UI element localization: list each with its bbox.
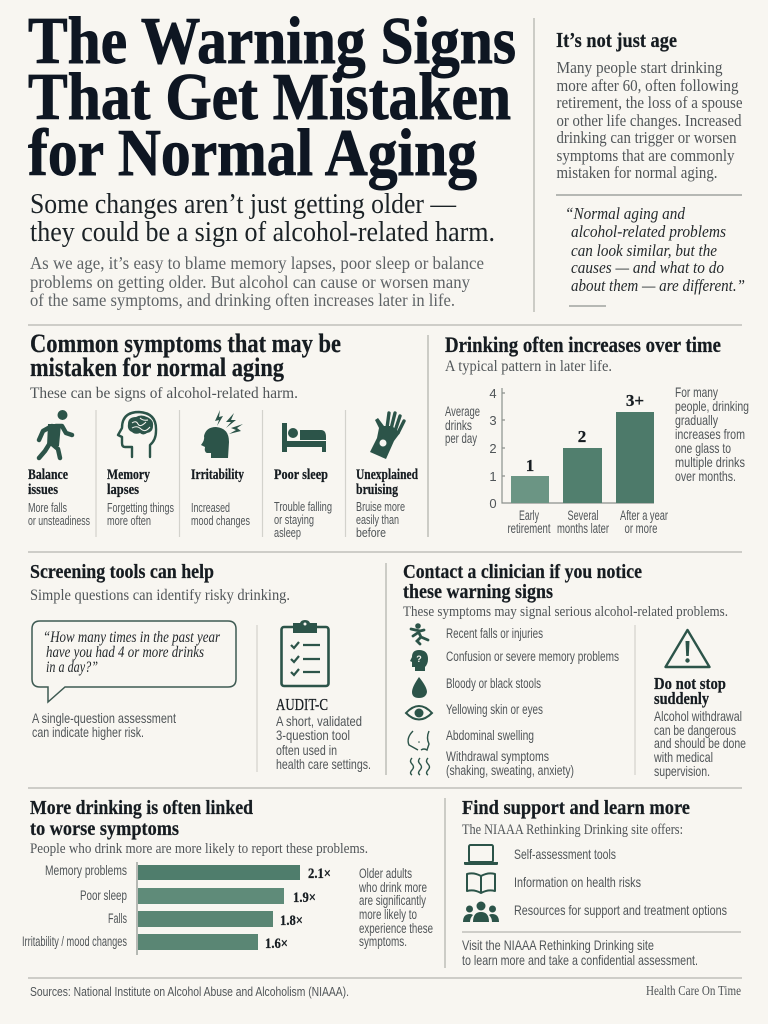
- text: AUDIT-C description: 3-question tool: [276, 727, 350, 743]
- pull quote: can look similar, but the: [571, 241, 717, 260]
- bar values: 2: [578, 427, 586, 446]
- text: AUDIT-C description: A short, validated: [276, 713, 362, 729]
- icon: people: [463, 902, 499, 922]
- y-axis ticks: 3: [489, 413, 497, 428]
- intro paragraph: [30, 253, 484, 310]
- bar values: 1: [526, 456, 534, 475]
- row: poor sleep: [80, 888, 316, 906]
- icon: bed: [282, 423, 326, 452]
- text: single question assessment: A single-question assessment: [32, 710, 176, 726]
- subheading: find support: The NIAAA Rethinking Drinking site offers:: [462, 822, 683, 838]
- subheading: screening tools: Simple questions can identify risky drinking.: [30, 587, 290, 604]
- heading: find support: Find support and learn more: [462, 797, 690, 819]
- warning sign: withdrawal symptoms: Withdrawal symptoms: [446, 749, 549, 764]
- warning sign: recent falls: [411, 623, 543, 644]
- bar chart: average drinks per day: [445, 386, 668, 536]
- resource: self-assessment: [464, 845, 616, 865]
- heading: do not stop suddenly: suddenly: [654, 689, 710, 708]
- symptom: balance issues: Balance: [28, 467, 68, 483]
- text block: it's not just age: mistaken for normal aging.: [556, 163, 718, 182]
- symptom: unexplained bruising: bruising: [356, 482, 399, 498]
- symptom: balance issues: More falls: [28, 500, 67, 515]
- y-axis ticks: 4: [489, 386, 497, 401]
- pull quote: [565, 204, 745, 295]
- x-axis labels: or more: [624, 521, 658, 536]
- panel: find support: [462, 797, 741, 968]
- symptom: unexplained bruising: [356, 413, 418, 540]
- resource: self-assessment: Self-assessment tools: [514, 846, 616, 862]
- speech bubble: “How many times in the past year: [43, 629, 221, 646]
- icon: head with question mark: [410, 650, 428, 671]
- resource: health risks: [467, 873, 641, 893]
- y-axis title: per day: [445, 431, 477, 446]
- symptom: irritability: Irritability: [191, 467, 245, 483]
- y-axis ticks: 2: [489, 441, 497, 456]
- pull quote: causes — and what to do: [571, 258, 724, 277]
- text block: it's not just age: Many people start drinking: [556, 58, 722, 77]
- icon: shaking waves: [410, 758, 430, 775]
- chart note: For many: [675, 384, 718, 400]
- subheading: drinking increases: A typical pattern in later life.: [445, 358, 612, 375]
- x-axis labels: retirement: [508, 521, 551, 536]
- symptom: irritability: mood changes: [191, 513, 250, 528]
- y-axis ticks: 1: [489, 469, 497, 484]
- icon: head with question mark: ?: [416, 654, 422, 664]
- warning sign: bloody stools: Bloody or black stools: [446, 676, 541, 691]
- chart note: who drink more: [358, 880, 427, 895]
- heading: do not stop suddenly: [654, 674, 726, 708]
- chart note: [675, 384, 749, 484]
- chart note: [358, 866, 433, 949]
- warning sign: recent falls: Recent falls or injuries: [446, 626, 543, 641]
- bar: early retirement: [511, 476, 549, 503]
- icon: laptop: [464, 845, 498, 865]
- panel: contact a clinician: [403, 561, 746, 779]
- heading: more drinking: [30, 797, 254, 840]
- symptom: memory lapses: Forgetting things: [107, 500, 174, 515]
- symptom: irritability: [191, 410, 250, 528]
- row: irritability: Irritability / mood changes: [22, 934, 127, 949]
- text block: it's not just age: more after 60, often following: [556, 76, 738, 95]
- subheading: contact a clinician: These symptoms may signal serious alcohol-related problems.: [403, 604, 728, 620]
- heading: it's not just age: It’s not just age: [556, 28, 677, 52]
- symptom: memory lapses: more often: [107, 513, 151, 528]
- row: memory problems: [45, 863, 331, 882]
- call to action text: to learn more and take a confidential assessment.: [462, 952, 698, 968]
- y-axis ticks: 0: [489, 496, 497, 511]
- chart note: multiple drinks: [675, 454, 745, 470]
- icon: open book: [467, 873, 495, 893]
- symptom: memory lapses: Memory: [107, 467, 151, 483]
- text block: it's not just age: symptoms that are commonly: [556, 146, 735, 165]
- heading: AUDIT-C: AUDIT-C: [276, 695, 328, 714]
- icon: falling person: [411, 623, 428, 644]
- resource: health risks: Information on health risks: [514, 874, 641, 890]
- y-axis ticks: [489, 386, 497, 511]
- heading: common symptoms: Common symptoms that may be: [30, 329, 341, 358]
- text: withdrawal warning: with medical: [653, 749, 713, 765]
- text: withdrawal warning: [653, 708, 746, 779]
- symptom: memory lapses: lapses: [107, 482, 139, 498]
- heading: screening tools: Screening tools can help: [30, 561, 214, 583]
- text: AUDIT-C description: [276, 713, 371, 772]
- intro paragraph: As we age, it’s easy to blame memory lapses, poor sleep or balance: [30, 253, 484, 273]
- call to action text: [462, 937, 698, 968]
- warning sign: confusion: [410, 649, 619, 671]
- heading: contact a clinician: [403, 561, 642, 603]
- warning sign: abdominal swelling: Abdominal swelling: [446, 728, 534, 743]
- resource: support and treatment: [463, 902, 727, 922]
- heading: contact a clinician: Contact a clinician if you notice: [403, 561, 642, 583]
- heading: more drinking: to worse symptoms: [30, 818, 179, 840]
- row: memory problems: Memory problems: [45, 863, 127, 878]
- row: falls: Falls: [108, 911, 127, 926]
- speech bubble: have you had 4 or more drinks: [46, 644, 204, 661]
- intro paragraph: problems on getting older. But alcohol can cause or worsen many: [30, 272, 470, 292]
- subtitle: Some changes aren’t just getting older —: [30, 188, 457, 220]
- chart note: more likely to: [359, 907, 417, 922]
- title: That Get Mistaken: [28, 60, 511, 134]
- text: single question assessment: [32, 710, 176, 740]
- symptom: unexplained bruising: Unexplained: [356, 467, 418, 483]
- heading: contact a clinician: these warning signs: [403, 581, 553, 603]
- heading: common symptoms: mistaken for normal aging: [30, 353, 284, 382]
- symptom: unexplained bruising: before: [356, 525, 386, 540]
- text: single question assessment: can indicate higher risk.: [32, 724, 144, 740]
- row: irritability: 1.6×: [265, 936, 288, 952]
- icon: walking figure: [39, 410, 72, 458]
- footer: brand: Health Care On Time: [646, 983, 741, 998]
- icon: warning triangle: [666, 630, 710, 667]
- row: falls: 1.8×: [280, 913, 303, 929]
- text block: it's not just age: drinking can trigger or worsen: [556, 128, 736, 147]
- pull quote: about them — are different.”: [571, 276, 745, 295]
- row: memory problems: 2.1×: [308, 866, 331, 882]
- symptom: poor sleep: asleep: [274, 525, 301, 540]
- text block: it's not just age: retirement, the loss of a spouse: [556, 93, 742, 112]
- footer: sources: Sources: National Institute on Alcohol Abuse and Alcoholism (NIAAA).: [30, 984, 349, 999]
- panel: drinking increases over time: [445, 332, 749, 536]
- speech bubble: in a day?”: [46, 659, 98, 676]
- chart note: Older adults: [359, 866, 412, 881]
- symptom: unexplained bruising: easily than: [356, 512, 399, 527]
- symptom: memory lapses: [107, 412, 174, 528]
- bar: after a year or more: [616, 412, 654, 503]
- row: poor sleep: Poor sleep: [80, 888, 127, 903]
- warning sign: withdrawal symptoms: [410, 749, 574, 778]
- symptom: balance issues: [28, 410, 90, 528]
- heading: more drinking: More drinking is often linked: [30, 797, 254, 819]
- x-axis labels: [508, 508, 668, 536]
- row: poor sleep: 1.9×: [293, 890, 316, 906]
- y-axis title: [445, 404, 480, 446]
- icon: eye: [406, 706, 432, 720]
- x-axis labels: Early: [519, 508, 539, 523]
- text: withdrawal warning: Alcohol withdrawal: [654, 708, 742, 724]
- panel: more drinking worse symptoms: [22, 797, 433, 955]
- horizontal bar chart: [22, 862, 331, 955]
- pull quote: alcohol-related problems: [571, 222, 726, 241]
- speech bubble: [32, 621, 236, 702]
- chart note: one glass to: [675, 440, 731, 456]
- panel: it's not just age: [556, 28, 745, 306]
- y-axis title: Average: [445, 404, 480, 419]
- text: AUDIT-C description: health care settings.: [276, 756, 371, 772]
- icon: hand with bruise: [370, 413, 404, 459]
- row: irritability: [22, 934, 288, 952]
- subtitle: [30, 188, 495, 248]
- call to action text: Visit the NIAAA Rethinking Drinking site: [462, 937, 654, 953]
- heading: do not stop suddenly: Do not stop: [654, 674, 726, 693]
- title: for Normal Aging: [28, 116, 477, 190]
- symptom: poor sleep: Trouble falling: [274, 499, 332, 514]
- text: withdrawal warning: supervision.: [654, 763, 710, 779]
- chart note: gradually: [675, 412, 718, 428]
- title: [28, 4, 516, 190]
- title: The Warning Signs: [28, 4, 516, 78]
- warning sign: confusion: Confusion or severe memory problems: [446, 649, 619, 664]
- warning sign: withdrawal symptoms: (shaking, sweating, anxiety): [446, 763, 574, 778]
- warning sign: abdominal swelling: [408, 728, 534, 750]
- y-axis title: drinks: [445, 418, 472, 433]
- x-axis labels: months later: [557, 521, 609, 536]
- icon: head with brain: [118, 412, 156, 457]
- symptom: unexplained bruising: Bruise more: [356, 499, 405, 514]
- chart note: are significantly: [359, 893, 426, 908]
- icon: drop: [412, 677, 427, 698]
- subheading: common symptoms: These can be signs of alcohol-related harm.: [30, 385, 298, 402]
- chart note: symptoms.: [359, 934, 407, 949]
- panel: common symptoms: [28, 329, 418, 540]
- symptom: poor sleep: or staying: [274, 512, 314, 527]
- intro paragraph: of the same symptoms, and drinking often increases later in life.: [30, 290, 455, 310]
- warning sign: yellowing: [406, 702, 543, 720]
- bar values: 3+: [626, 391, 644, 410]
- heading: common symptoms: [30, 329, 341, 382]
- bar values: [526, 391, 644, 475]
- warning sign: yellowing: Yellowing skin or eyes: [446, 702, 543, 717]
- warning sign: bloody stools: [412, 676, 541, 698]
- symptom: irritability: Increased: [191, 500, 230, 515]
- subheading: more drinking: People who drink more are more likely to report these problems.: [30, 841, 368, 857]
- icon: clipboard checklist: [282, 620, 328, 686]
- row: falls: [108, 911, 303, 929]
- chart note: experience these: [359, 921, 433, 936]
- x-axis labels: After a year: [620, 508, 668, 523]
- symptom: poor sleep: Poor sleep: [274, 467, 328, 483]
- symptom: poor sleep: [274, 423, 332, 540]
- chart note: over months.: [675, 468, 736, 484]
- chart note: increases from: [675, 426, 745, 442]
- panel: screening tools: [30, 561, 371, 772]
- pull quote: “Normal aging and: [565, 204, 686, 223]
- text: withdrawal warning: can be dangerous: [654, 722, 736, 738]
- symptom: balance issues: or unsteadiness: [28, 513, 90, 528]
- x-axis labels: Several: [568, 508, 598, 523]
- icon: abdomen: [408, 731, 429, 750]
- symptom: balance issues: issues: [28, 482, 58, 498]
- text block: it's not just age: or other life changes. Increased: [556, 111, 742, 130]
- text: AUDIT-C description: often used in: [276, 742, 337, 758]
- text block: it's not just age: [556, 58, 742, 182]
- bar: several months later: [563, 448, 602, 503]
- subtitle: they could be a sign of alcohol-related harm.: [30, 216, 495, 248]
- icon: head with lightning: [201, 410, 243, 458]
- heading: drinking increases: Drinking often increases over time: [445, 332, 721, 357]
